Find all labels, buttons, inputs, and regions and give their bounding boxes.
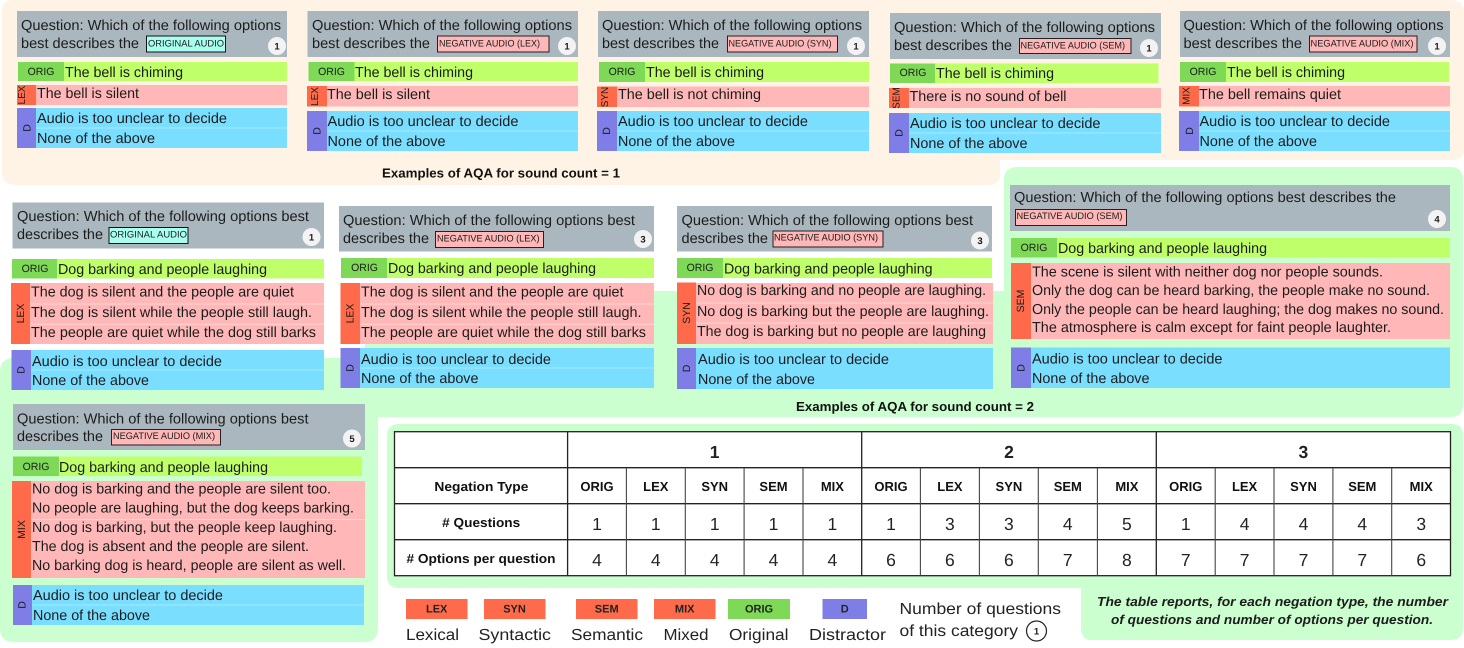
note: table explanation: of questions and number of options per question.: [1111, 612, 1433, 627]
distractor options: [1179, 111, 1450, 151]
negative options: No dog is barking and no people are laughing.: [697, 283, 986, 299]
question box: best describes the: [312, 36, 430, 52]
negative option: The bell is silent: [327, 87, 430, 103]
negative options: The atmosphere is calm except for faint people laughter.: [1032, 320, 1391, 336]
table: question and option counts: SYN: [701, 479, 728, 494]
question box: describes the: [343, 231, 429, 247]
table: question and option counts: SYN: [1290, 479, 1317, 494]
negative options: The people are quiet while the dog still barks: [361, 325, 646, 341]
original option: The bell is chiming: [1227, 65, 1345, 81]
table: question and option counts: MIX: [1410, 479, 1433, 494]
question box: describes the: [682, 231, 768, 247]
question box: 1: [274, 42, 280, 52]
card: bell syntactic: [597, 11, 869, 151]
distractor options: D: [16, 601, 28, 609]
question box: 3: [640, 234, 646, 246]
question box: describes the: [17, 227, 103, 243]
legend: lexical: [406, 599, 468, 644]
question box: best describes the: [602, 36, 719, 52]
question box: 1: [309, 232, 315, 244]
legend: original: ORIG: [745, 604, 773, 616]
table: question and option counts: SEM: [1054, 479, 1082, 494]
original option: Dog barking and people laughing: [388, 261, 596, 277]
table: question and option counts: 4: [592, 550, 602, 570]
legend: distractor: [809, 599, 887, 644]
table: question and option counts: 4: [828, 550, 838, 570]
negative option: LEX: [17, 85, 28, 104]
negative options: The dog is absent and the people are silent.: [32, 539, 309, 555]
question box: NEGATIVE AUDIO (SYN): [774, 232, 878, 244]
table: question and option counts: 6: [945, 550, 955, 570]
distractor options: None of the above: [618, 134, 735, 150]
distractor options: D: [16, 366, 28, 374]
legend: original: [728, 599, 790, 644]
table: question and option counts: 4: [651, 550, 661, 570]
card: bell semantic: [889, 13, 1161, 153]
negative options: The scene is silent with neither dog nor people sounds.: [1032, 264, 1383, 280]
table: question and option counts: LEX: [937, 479, 963, 494]
table: question and option counts: SEM: [759, 479, 788, 494]
table: question and option counts: ORIG: [580, 479, 614, 494]
question box: ORIGINAL AUDIO: [148, 38, 224, 50]
question box: Question: Which of the following options best: [17, 209, 309, 225]
original option: [18, 62, 287, 81]
table: question and option counts: # Options per question: [406, 551, 556, 566]
original option: [890, 64, 1158, 83]
table: question and option counts: 1: [1181, 514, 1191, 534]
table: question and option counts: LEX: [643, 479, 669, 494]
distractor options: None of the above: [37, 131, 155, 147]
legend: syntactic: [478, 599, 551, 644]
table: question and option counts: 4: [1299, 514, 1309, 534]
negative option: The bell is silent: [37, 86, 139, 102]
negative options: [12, 481, 365, 578]
distractor options: None of the above: [328, 134, 446, 150]
question box: Question: Which of the following options: [1184, 18, 1444, 34]
question box: Question: Which of the following options best: [682, 213, 973, 229]
card: dog lexical: [339, 206, 654, 388]
legend: question count badge: of this category: [900, 623, 1018, 640]
table: question and option counts: Negation Type: [434, 479, 528, 494]
card: dog mixed: [12, 404, 365, 625]
original option: [1180, 62, 1449, 82]
table: question and option counts: 4: [1063, 514, 1073, 534]
question box: [1180, 11, 1450, 57]
distractor options: Audio is too unclear to decide: [1200, 114, 1390, 130]
original option: The bell is chiming: [65, 65, 183, 81]
original option: ORIG: [900, 67, 926, 79]
negative options: The dog is silent while the people still laugh.: [31, 305, 312, 321]
distractor options: D: [1184, 127, 1196, 135]
distractor options: Audio is too unclear to decide: [328, 114, 518, 130]
distractor options: None of the above: [1200, 134, 1317, 150]
negative option: [1179, 86, 1450, 106]
distractor options: D: [601, 127, 613, 135]
table: question and option counts: 1: [710, 514, 720, 534]
legend: mixed: MIX: [675, 604, 695, 616]
table: question and option counts: ORIG: [1169, 479, 1202, 494]
negative option: [17, 85, 287, 105]
table: question and option counts: 3: [1299, 442, 1309, 462]
card: dog semantic: [1010, 185, 1450, 388]
negative options: No dog is barking, but the people keep laughing.: [32, 520, 337, 536]
negative option: SYN: [600, 87, 611, 107]
distractor options: [1011, 348, 1450, 388]
negative option: LEX: [310, 87, 321, 106]
table: question and option counts: 6: [886, 550, 896, 570]
table: question and option counts: LEX: [1232, 479, 1258, 494]
original option: ORIG: [1021, 242, 1047, 254]
negative options: Only the dog can be heard barking, the people make no sound.: [1032, 283, 1430, 299]
original option: ORIG: [609, 66, 635, 78]
table: question and option counts: 4: [769, 550, 779, 570]
table: question and option counts: 7: [1240, 550, 1249, 570]
distractor options: D: [681, 364, 693, 372]
negative options: The people are quiet while the dog still barks: [31, 325, 316, 341]
question box: NEGATIVE AUDIO (MIX): [113, 431, 215, 442]
table: question and option counts: 1: [651, 514, 661, 534]
distractor options: D: [22, 124, 34, 132]
table: question and option counts: 1: [828, 514, 837, 534]
legend: mixed: Mixed: [664, 627, 708, 644]
table: question and option counts: 3: [945, 514, 955, 534]
question box: Question: Which of the following options: [312, 18, 572, 34]
question box: [598, 11, 869, 57]
distractor options: None of the above: [361, 371, 478, 387]
negative options: The dog is silent while the people still laugh.: [361, 305, 642, 321]
question box: 3: [977, 236, 983, 247]
question box: best describes the: [1184, 36, 1302, 52]
legend: [406, 599, 1061, 644]
question box: NEGATIVE AUDIO (SEM): [1020, 40, 1125, 52]
original option: [599, 62, 869, 82]
original option: ORIG: [23, 461, 49, 473]
table: question and option counts: 6: [1416, 550, 1426, 570]
negative options: No barking dog is heard, people are silent as well.: [32, 558, 346, 574]
negative options: [340, 283, 654, 344]
question box: 4: [1434, 214, 1440, 226]
distractor options: [17, 108, 287, 148]
legend: lexical: LEX: [426, 604, 448, 616]
negative option: [597, 86, 869, 107]
distractor options: D: [894, 129, 906, 137]
question box: [677, 206, 992, 252]
table: question and option counts: 1: [592, 514, 602, 534]
question box: ORIGINAL AUDIO: [110, 230, 187, 240]
negative options: Only the people can be heard laughing; the dog makes no sound.: [1032, 302, 1444, 318]
original option: [677, 258, 992, 278]
distractor options: [597, 111, 869, 151]
original option: [12, 259, 324, 278]
table: question and option counts: 7: [1357, 550, 1367, 570]
panel: sound count 1 background: [2, 0, 1464, 185]
original option: ORIG: [318, 66, 345, 78]
table: question and option counts: 1: [769, 514, 778, 534]
negative option: [307, 86, 578, 106]
question box: NEGATIVE AUDIO (SYN): [728, 38, 832, 50]
table: question and option counts: MIX: [821, 479, 844, 494]
table: question and option counts: 4: [710, 550, 720, 570]
table: question and option counts: SEM: [1348, 479, 1376, 494]
table: question and option counts: 6: [1004, 550, 1014, 570]
panel: sound count 2 background: [0, 167, 1463, 642]
negative options: The dog is barking but no people are laughing: [697, 324, 986, 340]
distractor options: None of the above: [33, 608, 150, 624]
negative option: The bell remains quiet: [1199, 87, 1341, 103]
distractor options: None of the above: [32, 373, 149, 389]
question box: NEGATIVE AUDIO (LEX): [437, 234, 540, 244]
legend: semantic: Semantic: [571, 627, 643, 644]
note: table explanation: [1097, 594, 1449, 627]
distractor options: Audio is too unclear to decide: [910, 116, 1100, 132]
distractor options: [340, 348, 654, 388]
negative option: There is no sound of bell: [910, 89, 1066, 105]
table: question and option counts: [394, 432, 1450, 576]
question box: [17, 11, 287, 57]
negative option: [889, 87, 1161, 109]
card: dog syntactic: [677, 206, 993, 389]
question box: NEGATIVE AUDIO (SEM): [1016, 211, 1122, 222]
original option: ORIG: [28, 66, 54, 78]
legend: question count badge: Number of questions: [900, 601, 1061, 618]
negative options: LEX: [344, 304, 356, 323]
original option: The bell is chiming: [355, 65, 473, 81]
card: bell mixed: [1179, 11, 1450, 151]
legend: question count badge: [900, 601, 1061, 641]
heading: sound count 2: Examples of AQA for sound count = 2: [796, 399, 1034, 414]
table: question and option counts: 7: [1063, 550, 1073, 570]
table: question and option counts: 4: [1357, 514, 1367, 534]
question box: [1010, 185, 1450, 231]
negative options: SEM: [1015, 290, 1027, 312]
question box: NEGATIVE AUDIO (MIX): [1310, 38, 1414, 50]
legend: distractor: Distractor: [809, 627, 887, 644]
original option: [1011, 238, 1450, 258]
distractor options: [889, 113, 1161, 153]
table: question and option counts: 3: [1416, 514, 1426, 534]
distractor options: Audio is too unclear to decide: [37, 111, 227, 127]
question box: [12, 202, 324, 248]
negative options: MIX: [16, 520, 28, 539]
question box: describes the: [17, 429, 103, 445]
distractor options: None of the above: [698, 372, 815, 388]
table: question and option counts: ORIG: [874, 479, 908, 494]
distractor options: Audio is too unclear to decide: [698, 352, 889, 368]
legend: question count badge: 1: [1034, 626, 1040, 638]
negative option: SEM: [892, 87, 902, 109]
table: question and option counts: MIX: [1115, 479, 1139, 494]
table: question and option counts: 5: [1122, 514, 1132, 534]
question box: 1: [853, 42, 859, 52]
question box: Question: Which of the following options: [602, 18, 862, 34]
distractor options: Audio is too unclear to decide: [1032, 352, 1222, 368]
negative option: The bell is not chiming: [618, 87, 761, 103]
question box: 1: [1146, 44, 1152, 54]
negative options: SYN: [681, 302, 693, 324]
card: bell original: [17, 11, 287, 148]
question box: 1: [1434, 42, 1440, 52]
table: question and option counts: # Questions: [442, 515, 520, 530]
distractor options: D: [312, 127, 324, 135]
table: question and option counts: 7: [1181, 550, 1191, 570]
question box: best describes the: [894, 38, 1012, 54]
question box: Question: Which of the following options: [894, 20, 1155, 36]
distractor options: Audio is too unclear to decide: [33, 588, 223, 604]
question box: best describes the: [21, 36, 139, 52]
original option: [341, 258, 654, 278]
negative option: MIX: [1182, 87, 1192, 105]
legend: mixed: [654, 599, 716, 644]
table: question and option counts: 3: [1004, 514, 1014, 534]
original option: Dog barking and people laughing: [58, 262, 267, 278]
original option: ORIG: [351, 262, 378, 274]
question box: 1: [564, 42, 570, 52]
question box: 5: [349, 434, 355, 445]
original option: Dog barking and people laughing: [59, 460, 268, 476]
note: table explanation: The table reports, for each negation type, the number: [1097, 594, 1449, 609]
panel: table background: [387, 424, 1463, 640]
original option: [308, 62, 578, 81]
distractor options: Audio is too unclear to decide: [32, 354, 222, 370]
heading: sound count 1: Examples of AQA for sound count = 1: [382, 166, 620, 180]
original option: The bell is chiming: [936, 66, 1054, 82]
question box: Question: Which of the following options best: [17, 412, 308, 428]
card: bell lexical: [307, 11, 578, 151]
table: question and option counts: 7: [1299, 550, 1308, 570]
negative options: No people are laughing, but the dog keeps barking.: [32, 500, 354, 516]
negative options: LEX: [15, 304, 27, 323]
distractor options: [13, 585, 364, 625]
question box: [339, 206, 654, 252]
original option: Dog barking and people laughing: [1058, 241, 1267, 257]
original option: ORIG: [1190, 66, 1216, 78]
distractor options: D: [344, 364, 356, 372]
original option: The bell is chiming: [646, 65, 764, 81]
distractor options: [307, 111, 578, 151]
original option: ORIG: [687, 262, 713, 274]
negative options: [11, 283, 324, 344]
legend: semantic: SEM: [595, 604, 619, 616]
question box: [308, 11, 578, 57]
distractor options: [677, 348, 993, 389]
legend: original: Original: [729, 627, 788, 644]
question box: [13, 404, 365, 450]
negative options: No dog is barking and the people are silent too.: [32, 482, 331, 498]
original option: [13, 456, 362, 476]
table: question and option counts: 2: [1004, 442, 1014, 462]
table: question and option counts: SYN: [996, 479, 1022, 494]
question box: Question: Which of the following options best describes the: [1014, 190, 1396, 206]
distractor options: Audio is too unclear to decide: [361, 352, 551, 368]
legend: lexical: Lexical: [406, 627, 459, 644]
table: question and option counts: 1: [710, 442, 720, 462]
question box: NEGATIVE AUDIO (LEX): [439, 38, 540, 50]
negative options: No dog is barking but the people are laughing.: [697, 304, 989, 320]
original option: ORIG: [22, 263, 48, 275]
legend: syntactic: SYN: [503, 604, 526, 616]
negative options: The dog is silent and the people are quiet: [361, 284, 624, 300]
legend: semantic: [571, 599, 643, 644]
distractor options: Audio is too unclear to decide: [618, 114, 808, 130]
distractor options: D: [1016, 364, 1028, 372]
table: question and option counts: 4: [1240, 514, 1250, 534]
card: dog original: [11, 202, 324, 390]
distractor options: None of the above: [1032, 371, 1150, 387]
legend: distractor: D: [841, 604, 849, 616]
original option: Dog barking and people laughing: [724, 262, 932, 278]
negative options: [677, 282, 993, 344]
negative options: [1011, 263, 1450, 339]
question box: [890, 13, 1161, 59]
negative options: The dog is silent and the people are quiet: [31, 284, 294, 300]
legend: syntactic: Syntactic: [478, 627, 551, 644]
table: question and option counts: 8: [1122, 550, 1132, 570]
question box: Question: Which of the following options best: [343, 213, 635, 229]
table: question and option counts: 1: [886, 514, 896, 534]
distractor options: None of the above: [910, 136, 1028, 152]
distractor options: [12, 350, 324, 390]
question box: Question: Which of the following options: [21, 18, 281, 34]
